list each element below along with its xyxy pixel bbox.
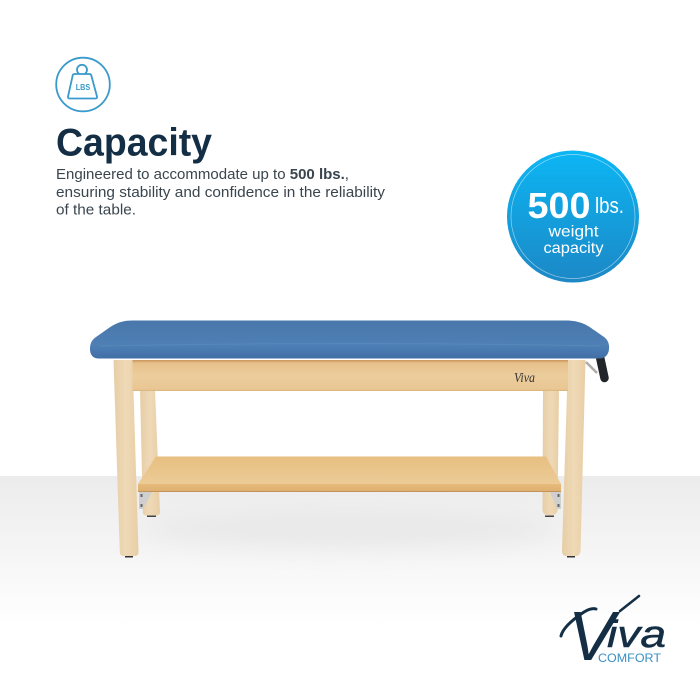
badge: 500 lbs weight capacity: 500 [528,185,590,226]
adjustment handle [586,357,604,378]
description text [56,167,386,218]
badge: 500 lbs weight capacity: lbs. [595,193,624,218]
blue cushion [90,320,609,358]
floor background [0,476,700,626]
logo: Viva Comfort [561,596,666,675]
title: Capacity [56,122,212,164]
badge: 500 lbs weight capacity: weight [547,224,599,240]
back right leg [542,390,559,517]
logo: Viva Comfort: V [568,597,621,675]
badge: 500 lbs weight capacity: capacity [544,240,604,257]
icon: weight with LBS label [56,58,110,111]
logo: Viva Comfort: iva [607,614,666,656]
description text: Engineered to accommodate up to 500 lbs., [56,167,349,183]
front left leg [114,360,138,558]
back left leg [140,390,160,517]
front right leg [562,360,586,558]
shelf brackets [139,492,561,509]
logo: Viva Comfort: COMFORT [598,651,662,665]
apron [132,360,568,391]
apron logo: Viva [514,371,535,386]
badge: 500 lbs weight capacity [507,150,639,282]
description text: of the table. [56,202,136,218]
lower shelf [138,456,561,492]
floor shadow [140,512,560,548]
description text: ensuring stability and confidence in the reliability [56,185,386,201]
icon: weight with LBS label: LBS [76,82,91,92]
treatment table [90,320,609,558]
